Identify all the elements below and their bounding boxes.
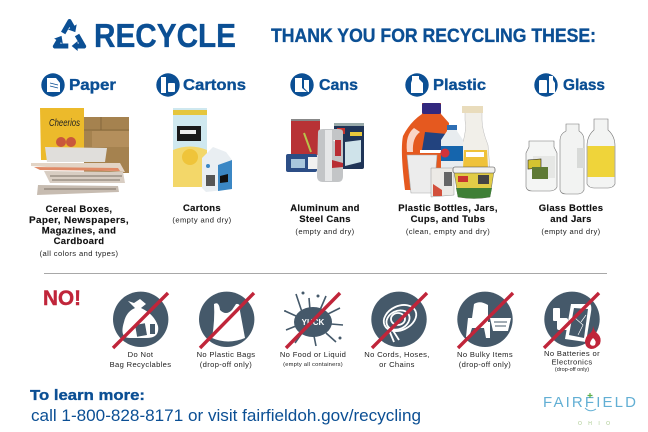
illustration: boxes and paper stack: Cheerios (49, 118, 80, 129)
panel: cans (286, 73, 364, 236)
label: no batteries or electronics: Electronics (552, 358, 592, 366)
label: no batteries or electronics: No Batteries or (544, 349, 600, 358)
label: cans: Steel Cans (299, 214, 351, 225)
illustration: juice and milk cartons (173, 108, 232, 192)
text block: learn more: call 1-800-828-8171 or visit fairfieldoh.gov/recycling (31, 406, 421, 425)
label: plastic (398, 203, 498, 236)
label: no plastic bags: No Plastic Bags (197, 350, 255, 359)
label: no bulky items (457, 350, 513, 369)
text block: learn more (30, 387, 421, 425)
panel: glass (526, 73, 615, 236)
label: paper: Paper, Newspapers, (29, 215, 129, 226)
label: no bagged recyclables (110, 350, 171, 369)
icon: cans heading (290, 73, 314, 97)
label: no batteries or electronics (544, 349, 600, 373)
icon: paper heading (41, 73, 65, 97)
label: plastic: Cups, and Tubs (411, 214, 485, 225)
subtitle: THANK YOU FOR RECYCLING THESE: (271, 25, 596, 47)
label: no batteries or electronics: (drop-off only) (555, 367, 589, 373)
icon: no cords (371, 292, 427, 348)
logo: fairfield: OHIO (578, 421, 610, 427)
label: paper: (all colors and types) (40, 249, 118, 258)
label: no cords: or Chains (379, 360, 415, 369)
icon: no food or liquid: YUCK (302, 318, 325, 327)
label: paper: Cereal Boxes, (46, 204, 112, 215)
title: RECYCLE (94, 17, 236, 54)
label: glass (539, 203, 603, 236)
label: no food or liquid (280, 350, 346, 368)
label: cartons: Cartons (183, 203, 221, 214)
heading: cans: Cans (319, 77, 358, 94)
label: no cords: No Cords, Hoses, (364, 350, 430, 359)
label: no plastic bags: (drop-off only) (200, 360, 252, 369)
label: paper: Magazines, and (42, 226, 116, 236)
label: no bagged recyclables: Do Not (128, 350, 154, 359)
label: cartons: (empty and dry) (172, 216, 232, 224)
illustration: plastic containers (402, 103, 495, 198)
label: no food or liquid: (empty all containers) (283, 362, 343, 368)
icon: no bagged recyclables (113, 292, 168, 348)
icon: no bulky items (457, 292, 513, 348)
icon: recycle arrows (49, 19, 90, 55)
label: glass: Glass Bottles (539, 203, 603, 214)
label: no bulky items: No Bulky Items (457, 350, 513, 359)
label: cans: (empty and dry) (295, 227, 355, 236)
icon: cartons heading (156, 73, 180, 97)
label: no bagged recyclables: Bag Recyclables (110, 360, 171, 369)
label: plastic: Plastic Bottles, Jars, (398, 203, 498, 214)
text block: learn more: To learn more: (30, 387, 145, 404)
heading: plastic: Plastic (433, 77, 486, 94)
panel: cartons (156, 73, 246, 224)
label: glass: and Jars (550, 214, 592, 225)
label: cans (290, 203, 360, 236)
heading: paper: Paper (69, 77, 116, 94)
logo: fairfield (543, 393, 636, 427)
label: glass: (empty and dry) (541, 227, 601, 236)
illustration: glass jars and bottles (526, 119, 615, 194)
icon: no batteries or electronics (544, 292, 601, 349)
illustration: cans (286, 119, 364, 182)
label: plastic: (clean, empty and dry) (406, 227, 490, 236)
icon: no food or liquid (284, 292, 343, 348)
heading: cartons: Cartons (183, 77, 246, 94)
logo: fairfield: FAIRFIELD (543, 394, 636, 411)
panel: paper (29, 73, 129, 258)
label: paper: Cardboard (54, 236, 104, 247)
icon: no plastic bags (199, 292, 254, 348)
label: paper (29, 204, 129, 258)
label: no bulky items: (drop-off only) (459, 360, 511, 369)
heading: glass: Glass (563, 77, 605, 94)
panel: plastic (398, 73, 498, 236)
label: no plastic bags (197, 350, 255, 369)
label: no food or liquid: No Food or Liquid (280, 350, 346, 359)
label: cartons (172, 203, 232, 224)
icon: glass heading (534, 73, 558, 97)
illustration: boxes and paper stack (31, 108, 129, 195)
heading: no: NO! (43, 287, 81, 310)
label: cans: Aluminum and (290, 203, 360, 214)
label: no cords (364, 350, 430, 369)
icon: plastic heading (405, 73, 429, 97)
